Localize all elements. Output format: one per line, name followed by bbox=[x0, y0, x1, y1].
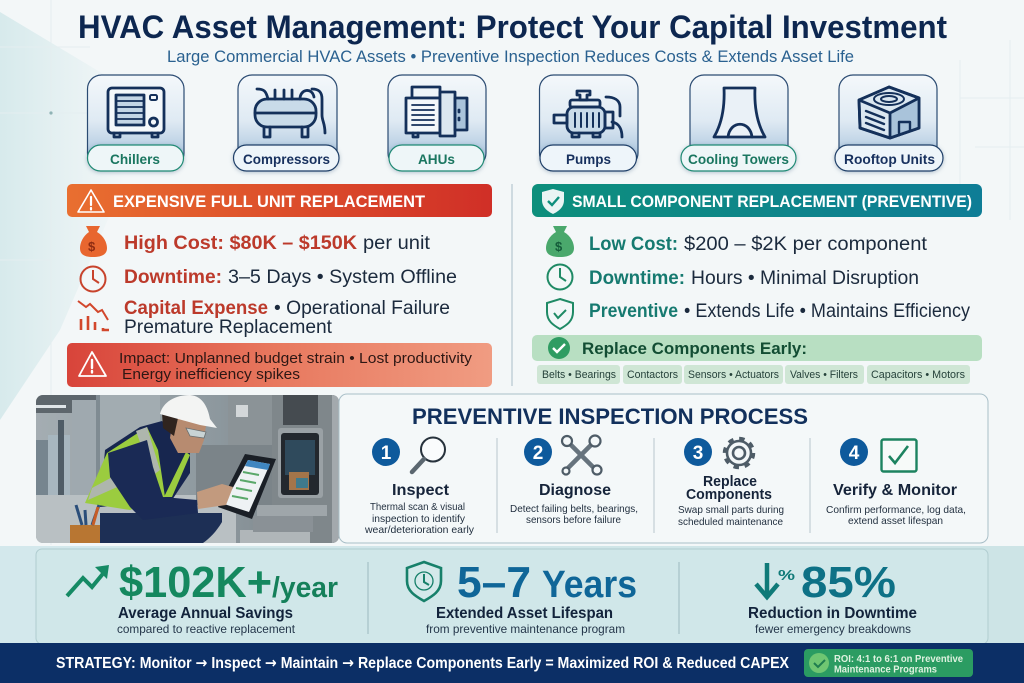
step 3: replace components bbox=[678, 438, 784, 528]
stat: annual savings: compared to reactive replacement bbox=[117, 622, 296, 636]
asset: Compressors: Compressors bbox=[243, 151, 330, 167]
header: expensive replacement bbox=[67, 184, 492, 217]
high cost row: High Cost: $80K – $150K bbox=[124, 233, 357, 254]
step 3: replace components: scheduled maintenance bbox=[678, 516, 783, 528]
icon: money bag red: $ bbox=[88, 239, 96, 254]
asset: Cooling Towers: Cooling Towers bbox=[688, 151, 789, 167]
downtime row: Downtime: bbox=[124, 267, 222, 288]
stat: annual savings bbox=[67, 558, 338, 636]
panel: preventive inspection process bbox=[339, 394, 988, 543]
panel: expensive full unit replacement bbox=[67, 184, 492, 387]
callout: impact bbox=[67, 343, 492, 387]
ROI badge bbox=[804, 649, 973, 677]
asset: Rooftop Units: Rooftop Units bbox=[844, 151, 935, 167]
stat: extended lifespan bbox=[407, 558, 637, 636]
asset: Compressors bbox=[234, 75, 339, 171]
stat: extended lifespan: from preventive maintenance program bbox=[426, 622, 625, 636]
worker torso bbox=[100, 421, 190, 507]
step 4: verify and monitor: 4 bbox=[849, 443, 860, 464]
stat: annual savings: Average Annual Savings bbox=[118, 605, 293, 622]
step 3: replace components: Components bbox=[686, 487, 772, 503]
step 2: diagnose: Diagnose bbox=[539, 482, 611, 499]
hi-vis vest bbox=[85, 427, 165, 510]
asset: Rooftop Units bbox=[835, 75, 943, 171]
icon: shield green bbox=[547, 299, 573, 329]
capital expense row: Premature Replacement bbox=[124, 317, 333, 338]
header: expensive replacement: EXPENSIVE FULL UNIT REPLACEMENT bbox=[113, 192, 426, 211]
downtime row: 3–5 Days • System Offline bbox=[228, 267, 457, 288]
asset: Pumps: Pumps bbox=[566, 151, 611, 167]
component chips: Belts • Bearings bbox=[542, 369, 616, 381]
asset: AHUs bbox=[388, 75, 486, 171]
stat: downtime reduction: fewer emergency breakdowns bbox=[755, 622, 911, 636]
step 4: verify and monitor: Verify & Monitor bbox=[833, 482, 957, 499]
downtime row bbox=[589, 268, 919, 289]
component chips: Valves • Filters bbox=[790, 369, 858, 381]
low cost row bbox=[589, 234, 928, 255]
capital expense row: Capital Expense bbox=[124, 298, 268, 319]
stat: downtime reduction bbox=[748, 558, 917, 636]
asset: Pumps bbox=[540, 75, 638, 171]
step 1: inspect bbox=[364, 438, 475, 536]
stat: annual savings: $102K+ bbox=[119, 558, 272, 607]
step 4: verify and monitor bbox=[826, 438, 966, 527]
low cost row: Low Cost: bbox=[589, 234, 678, 255]
step 2: diagnose: Detect failing belts, bearings, bbox=[510, 503, 638, 515]
stat: downtime reduction: % bbox=[778, 567, 795, 584]
photo: technician inspecting equipment with tablet bbox=[36, 395, 339, 543]
icon: money bag green bbox=[546, 226, 574, 257]
step 3: replace components: Replace bbox=[703, 474, 757, 490]
stats band bbox=[0, 546, 1024, 644]
component chips: Contactors bbox=[627, 369, 678, 381]
component chips bbox=[537, 365, 970, 384]
strategy bar bbox=[0, 643, 1024, 683]
title: HVAC Asset Management: Protect Your Capital Investment bbox=[78, 9, 947, 45]
stat: downtime reduction: 85% bbox=[801, 558, 896, 607]
header: preventive replacement bbox=[532, 184, 982, 217]
tool pouch bbox=[70, 525, 100, 543]
asset: Chillers: Chillers bbox=[110, 151, 160, 167]
stat: extended lifespan: Extended Asset Lifespan bbox=[436, 605, 613, 622]
preventive row: Preventive bbox=[589, 301, 678, 322]
high cost row: per unit bbox=[363, 233, 431, 254]
stat: extended lifespan: Years bbox=[542, 564, 637, 606]
capital expense row bbox=[124, 298, 450, 338]
icon: declining chart bbox=[78, 301, 109, 330]
step 1: inspect: 1 bbox=[381, 443, 392, 464]
header: preventive replacement: SMALL COMPONENT REPLACEMENT (PREVENTIVE) bbox=[572, 192, 972, 211]
low cost row: $200 – $2K per component bbox=[684, 234, 928, 255]
stat: annual savings: /year bbox=[272, 572, 338, 604]
stat: extended lifespan: 5–7 bbox=[457, 558, 531, 607]
step 3: replace components: 3 bbox=[693, 443, 703, 464]
panel: small component replacement bbox=[532, 184, 982, 384]
step 1: inspect: inspection to identify bbox=[372, 513, 466, 525]
icon: clock green bbox=[548, 264, 572, 290]
callout: impact: Impact: Unplanned budget strain • Lost productivity bbox=[119, 350, 473, 367]
ROI badge: ROI: 4:1 to 6:1 on Preventive bbox=[834, 653, 963, 665]
step 1: inspect: Inspect bbox=[392, 482, 450, 499]
capital expense row: • Operational Failure bbox=[274, 298, 450, 319]
callout: replace components early bbox=[532, 335, 982, 361]
worker legs bbox=[100, 513, 222, 543]
worker hand bbox=[197, 484, 233, 509]
step 1: inspect: Thermal scan & visual bbox=[370, 501, 465, 513]
step 2: diagnose: 2 bbox=[533, 443, 543, 464]
preventive row: • Extends Life • Maintains Efficiency bbox=[684, 301, 970, 322]
asset: Chillers bbox=[88, 75, 184, 171]
step 3: replace components: Swap small parts during bbox=[678, 504, 784, 516]
downtime row: Downtime: bbox=[589, 268, 685, 289]
component chips: Capacitors • Motors bbox=[871, 369, 965, 381]
callout: impact: Energy inefficiency spikes bbox=[122, 366, 300, 383]
step 4: verify and monitor: extend asset lifespan bbox=[848, 515, 943, 527]
downtime row: Hours • Minimal Disruption bbox=[691, 268, 919, 289]
stat: downtime reduction: Reduction in Downtime bbox=[748, 605, 917, 622]
step 4: verify and monitor: Confirm performance, log data, bbox=[826, 504, 966, 516]
icon: money bag red bbox=[80, 226, 107, 257]
process heading: PREVENTIVE INSPECTION PROCESS bbox=[412, 404, 808, 429]
worker head bbox=[170, 418, 207, 453]
downtime row bbox=[124, 267, 457, 288]
divider bbox=[511, 184, 513, 386]
hard hat bbox=[160, 395, 217, 428]
tablet bbox=[218, 454, 276, 519]
step 2: diagnose: sensors before failure bbox=[526, 514, 621, 526]
icon: clock red bbox=[80, 266, 106, 292]
worker arm bbox=[108, 440, 198, 520]
strategy bar: STRATEGY: Monitor → Inspect → Maintain → Replace Components Early = Maximized ROI & Reduced CAPEX bbox=[56, 654, 790, 672]
callout: replace components early: Replace Components Early: bbox=[582, 339, 807, 358]
asset: Cooling Towers bbox=[681, 75, 796, 171]
component chips: Sensors • Actuators bbox=[688, 369, 779, 381]
step 2: diagnose bbox=[510, 436, 638, 526]
ROI badge: Maintenance Programs bbox=[834, 664, 937, 676]
subtitle: Large Commercial HVAC Assets • Preventive Inspection Reduces Costs & Extends Asset Life bbox=[167, 47, 854, 66]
asset: AHUs: AHUs bbox=[418, 151, 455, 167]
icon: money bag green: $ bbox=[555, 239, 563, 254]
step 1: inspect: wear/deterioration early bbox=[364, 524, 475, 536]
